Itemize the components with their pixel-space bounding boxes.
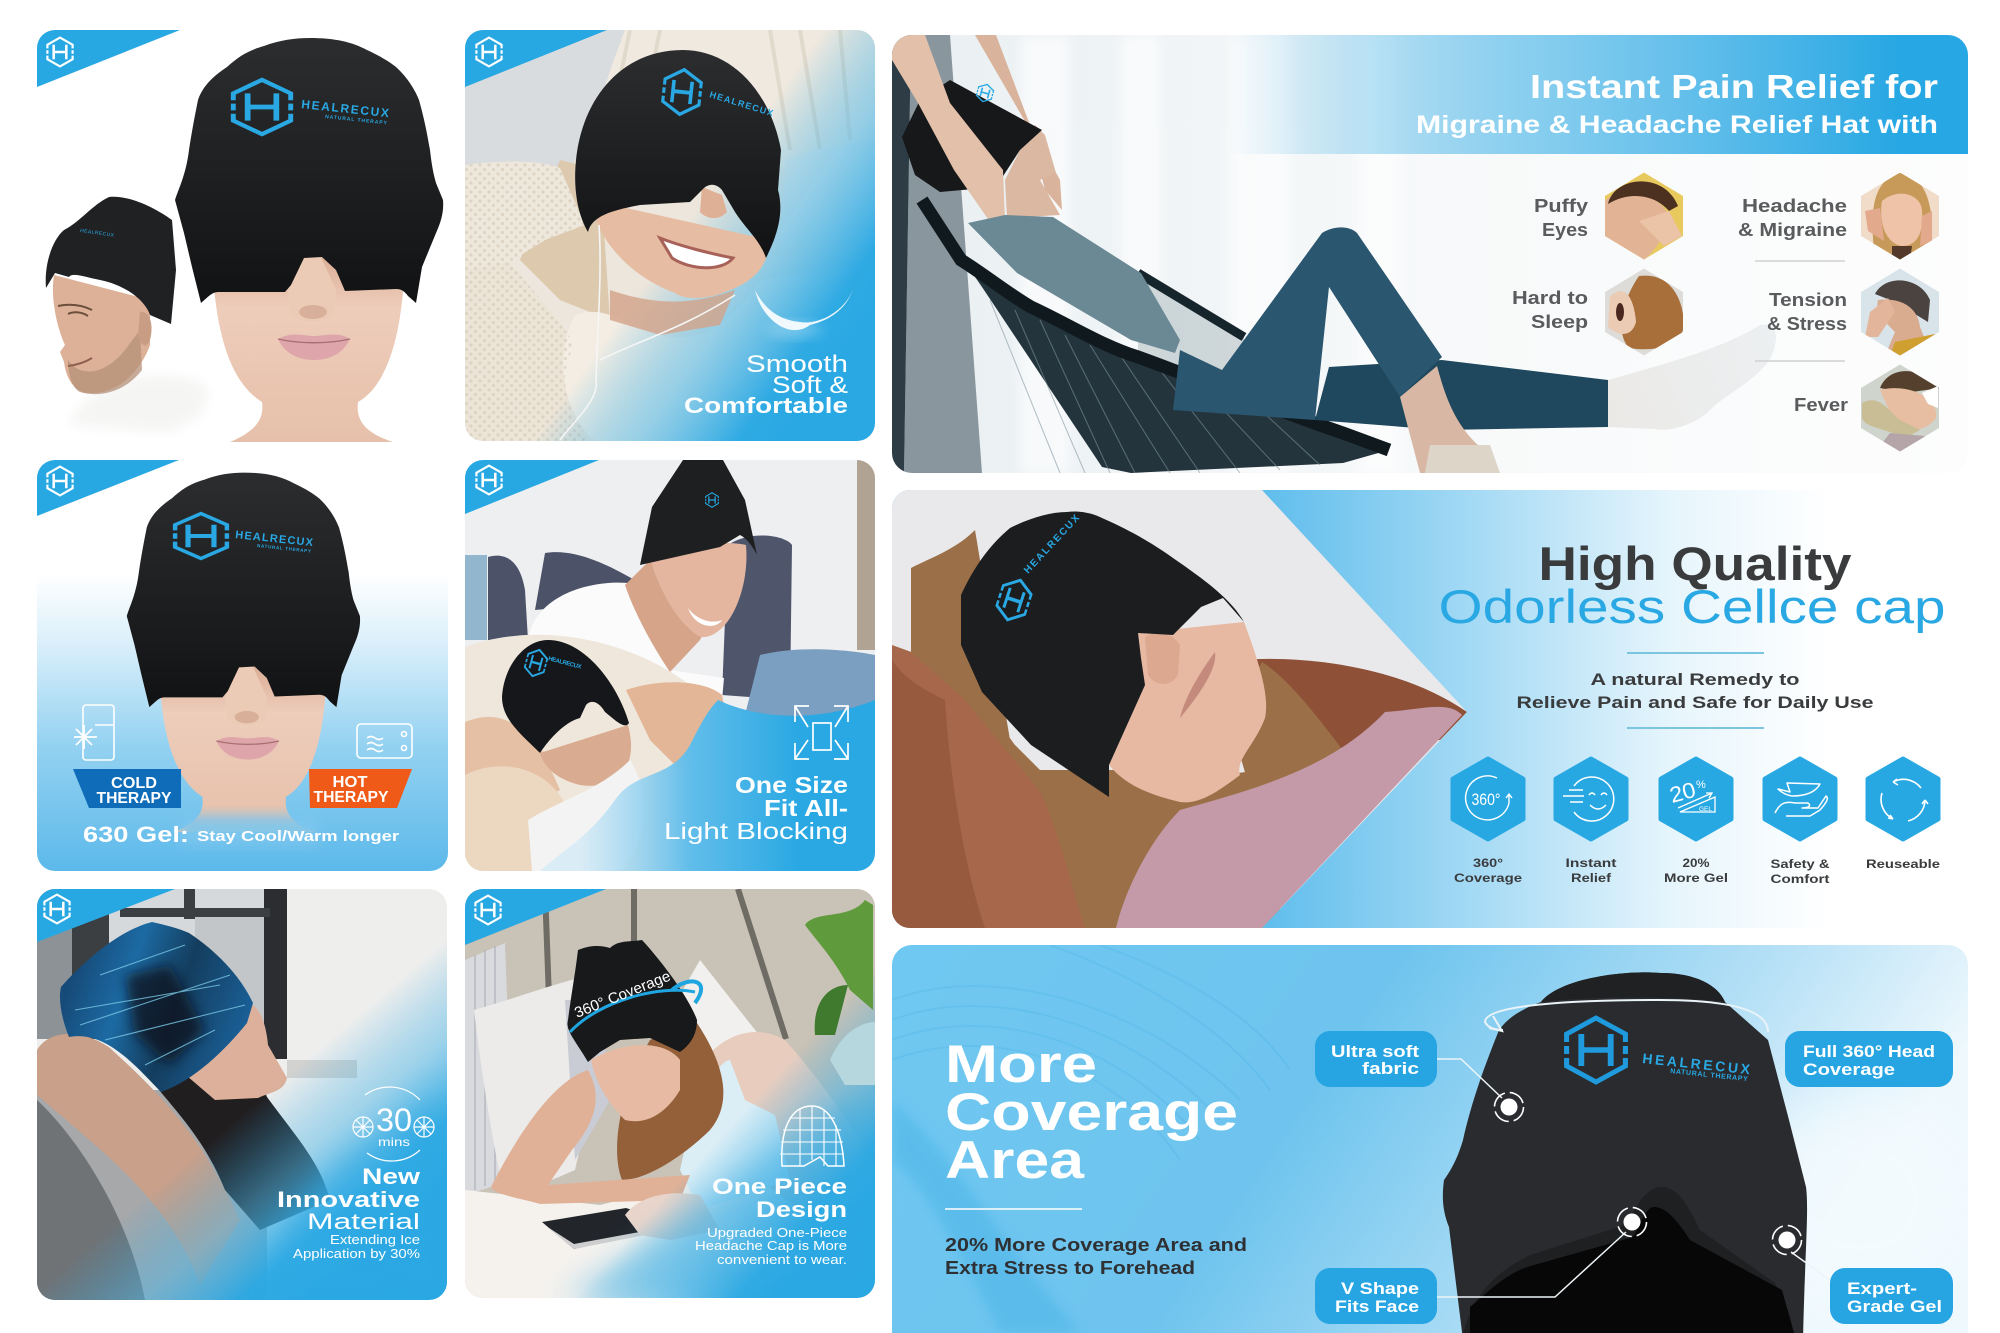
window frame: [37, 889, 287, 1059]
banner heading: Migraine & Headache Relief Hat with: [1416, 111, 1938, 139]
cap: [902, 80, 1042, 192]
pink shirt: [1116, 707, 1462, 928]
woman face fading: [159, 662, 327, 832]
icon: 30 mins: [353, 1087, 434, 1161]
sweater sleeves: [466, 162, 584, 254]
panel: instant pain relief: [892, 35, 1968, 475]
corner tag: [37, 460, 179, 516]
icon: microwave: [357, 724, 412, 758]
corner tag: [465, 30, 607, 87]
callout: v shape: V Shape: [1341, 1279, 1419, 1298]
callout: expert gel: Grade Gel: [1847, 1297, 1942, 1316]
cap logo: HEALRECUX: [301, 97, 390, 120]
cap logo: [994, 513, 1082, 624]
face and neck: [1005, 125, 1060, 218]
sleeping man panel: [465, 634, 687, 801]
top banner: [1100, 35, 1968, 154]
cap: [567, 940, 701, 1062]
cap logo: [662, 68, 774, 118]
panel: one piece design: [465, 889, 875, 1298]
caption: One Piece: [712, 1174, 847, 1199]
callout: ultra soft: Ultra soft: [1331, 1042, 1419, 1061]
heading: [945, 1035, 1238, 1190]
caption: Headache Cap is More: [695, 1239, 847, 1253]
callout: expert gel: Expert-: [1847, 1279, 1917, 1298]
man with cap: HEALRECUX: [80, 228, 115, 239]
feature labels: Coverage: [1454, 871, 1522, 885]
callout: expert gel: [1830, 1268, 1953, 1324]
heading: High Quality: [1538, 537, 1852, 590]
cap: [127, 473, 360, 707]
subheading: A natural Remedy to: [1590, 670, 1800, 689]
icon: 360 coverage: 360°: [1472, 790, 1500, 809]
callout: full 360: Full 360° Head: [1803, 1042, 1935, 1061]
photo: hard to sleep: [1604, 268, 1684, 356]
banner heading: Instant Pain Relief for: [1530, 68, 1938, 105]
callout: full 360: [1785, 1031, 1953, 1087]
blue cap: [60, 922, 253, 1092]
photo: puffy eyes: [1604, 172, 1684, 260]
hair: [617, 1020, 723, 1180]
pillow behind head: [520, 160, 610, 320]
corner tag: [465, 460, 599, 514]
360 coverage label: 360° Coverage: [572, 968, 673, 1022]
symptom labels: Headache: [1742, 196, 1847, 216]
caption: Design: [756, 1197, 847, 1222]
icon: more gel: %: [1696, 779, 1706, 791]
tablet: [542, 1208, 680, 1249]
cap logo: [1567, 1018, 1751, 1083]
feature labels: More Gel: [1664, 871, 1728, 885]
callout: ultra soft: [1315, 1031, 1437, 1087]
caption: Smooth: [746, 351, 848, 378]
hot therapy badge: [309, 769, 412, 808]
panel: more coverage area: [892, 945, 1980, 1333]
icon: feather: [755, 290, 853, 330]
icon: reuseable: [1868, 759, 1938, 839]
sock: [1608, 325, 1776, 430]
cap logo: NATURAL THERAPY: [325, 114, 388, 127]
icon: more gel: 20: [1667, 777, 1698, 808]
callout: v shape: [1315, 1268, 1437, 1324]
icon: more gel: GEL: [1699, 806, 1712, 813]
feature labels: 20%: [1682, 856, 1710, 870]
caption: Light Blocking: [664, 818, 848, 844]
gel caption: [84, 826, 399, 844]
sofa: [488, 552, 643, 640]
sofa: [37, 1090, 267, 1300]
plant: [805, 900, 873, 1035]
face and neck: [1109, 622, 1266, 802]
panel: high quality odorless: [892, 490, 1968, 932]
face and arm: [591, 1045, 680, 1121]
symptom labels: Fever: [1794, 395, 1848, 415]
caption: Fit All-: [764, 795, 848, 821]
360 arrow: [1485, 1000, 1768, 1032]
smiling woman: [528, 460, 757, 700]
woman face: [212, 250, 405, 442]
photo hexagon: [892, 490, 1482, 932]
caption: Soft &: [772, 372, 848, 399]
feature labels: Comfort: [1770, 872, 1830, 886]
cap logo: [175, 514, 314, 558]
panel: smooth soft comfortable: [465, 30, 875, 441]
symptom labels: [1512, 196, 1848, 415]
panel: one size fit all: [465, 460, 875, 871]
symptom labels: Eyes: [1542, 220, 1588, 240]
callout: ultra soft: fabric: [1362, 1059, 1419, 1078]
caption: convenient to wear.: [717, 1253, 847, 1267]
pillows: [465, 943, 514, 1195]
icon: instant relief: [1556, 759, 1626, 839]
heading: Coverage: [945, 1083, 1238, 1142]
feature labels: Instant: [1566, 856, 1616, 870]
icon: 30 mins: mins: [378, 1135, 410, 1149]
cap logo: HEALRECUX: [235, 529, 314, 549]
cap logo: NATURAL THERAPY: [1670, 1068, 1748, 1083]
hair and top: [155, 1076, 330, 1230]
marker: ultra soft: [1494, 1092, 1524, 1122]
jeans back leg: [1315, 360, 1608, 430]
panel: 630 gel hot and cold: [37, 460, 448, 871]
cap logo: [233, 80, 390, 134]
blue fade: [37, 889, 447, 1300]
body text: [945, 1234, 1247, 1278]
feature labels: [1454, 856, 1940, 886]
icon: 30 mins: 30: [376, 1102, 412, 1138]
caption: [685, 354, 848, 413]
cap: [175, 38, 443, 303]
hot therapy badge: HOT: [332, 774, 368, 791]
icon: safety and comfort: [1765, 759, 1835, 839]
subheading: Relieve Pain and Safe for Daily Use: [1516, 693, 1874, 712]
photo: tension: [1860, 268, 1940, 356]
cap logo: HEALRECUX: [1642, 1050, 1751, 1077]
hot therapy badge: THERAPY: [314, 789, 389, 806]
symptom labels: Puffy: [1534, 196, 1588, 216]
panel: product front view: [37, 30, 449, 442]
icon: expand: [795, 706, 848, 759]
cold therapy badge: COLD: [111, 775, 157, 792]
blue fade: [541, 30, 875, 441]
curtain post: [904, 35, 982, 473]
cap logo: NATURAL THERAPY: [257, 543, 311, 554]
gel caption: Stay Cool/Warm longer: [197, 828, 399, 845]
symptom labels: Hard to: [1512, 288, 1588, 308]
corner tag: [37, 889, 175, 942]
heading: [1438, 537, 1946, 633]
tank top and back: [700, 1032, 875, 1210]
hair: [911, 530, 1355, 928]
caption: Material: [307, 1209, 420, 1234]
cap: [1443, 972, 1807, 1333]
banner heading: [1416, 68, 1938, 139]
marker: v shape: [1618, 1208, 1646, 1236]
chair: [922, 200, 1389, 473]
panel: new innovative material: [37, 889, 447, 1300]
caption: Upgraded One-Piece: [707, 1226, 847, 1240]
near arm: [892, 35, 1005, 222]
caption: [695, 1174, 847, 1267]
leader lines: [1437, 1059, 1830, 1297]
marker: gel: [1772, 1226, 1802, 1254]
caption: New: [362, 1164, 421, 1189]
caption: Innovative: [277, 1187, 420, 1212]
earphone cable: [560, 225, 735, 440]
icon: more gel: [1661, 759, 1731, 839]
cap: [575, 50, 781, 258]
icon: 360 coverage: [1453, 759, 1523, 839]
man with cap: [46, 197, 208, 432]
cold therapy badge: THERAPY: [96, 790, 172, 807]
smiling face: [596, 208, 768, 298]
blue fade: [465, 889, 875, 1298]
gel caption: 630 Gel:: [83, 822, 189, 847]
sofa: [892, 645, 1110, 928]
feature labels: Reuseable: [1866, 857, 1940, 871]
cap: [961, 511, 1244, 797]
shirt: [968, 215, 1180, 353]
hand: [625, 1193, 720, 1240]
symptom labels: Sleep: [1531, 312, 1588, 332]
caption: Comfortable: [684, 393, 848, 418]
caption: One Size: [735, 772, 848, 798]
symptom labels: & Stress: [1767, 314, 1847, 334]
subheading: [1516, 670, 1874, 712]
feature labels: Relief: [1571, 871, 1612, 885]
symptom labels: & Migraine: [1738, 220, 1847, 240]
cap logo: HEALRECUX: [1022, 513, 1082, 576]
photo: headache: [1860, 172, 1940, 260]
body text: Extra Stress to Forehead: [945, 1257, 1195, 1278]
cold therapy badge: [73, 769, 181, 808]
blue wave: [540, 700, 875, 871]
symptom labels: Tension: [1769, 290, 1847, 310]
panel: one size fit all: HEALRECUX: [547, 656, 582, 671]
corner tag: [37, 30, 180, 87]
feature labels: Safety &: [1770, 857, 1830, 871]
feature labels: 360°: [1473, 856, 1503, 870]
icon: mesh cap: [780, 1106, 844, 1166]
bed sheet: [465, 1180, 875, 1298]
caption: Application by 30%: [293, 1247, 420, 1261]
jeans front leg: [1173, 227, 1442, 420]
caption: [664, 772, 848, 844]
photo: fever: [1860, 364, 1940, 452]
heading: Odorless Cellce cap: [1438, 580, 1946, 633]
far arm: [975, 35, 1062, 210]
icon: fridge: [74, 705, 114, 760]
heading: Area: [945, 1131, 1085, 1190]
caption: [277, 1164, 421, 1261]
heading: More: [945, 1035, 1097, 1094]
callout: v shape: Fits Face: [1335, 1297, 1419, 1316]
arm and shoulder: [37, 1034, 240, 1285]
face: [180, 1003, 287, 1100]
body text: 20% More Coverage Area and: [945, 1234, 1247, 1255]
cap logo: HEALRECUX: [708, 89, 774, 118]
corner tag: [465, 889, 606, 945]
callout: full 360: Coverage: [1803, 1060, 1895, 1079]
bare calf and shoe: [1400, 366, 1500, 473]
caption: Extending Ice: [330, 1233, 420, 1247]
